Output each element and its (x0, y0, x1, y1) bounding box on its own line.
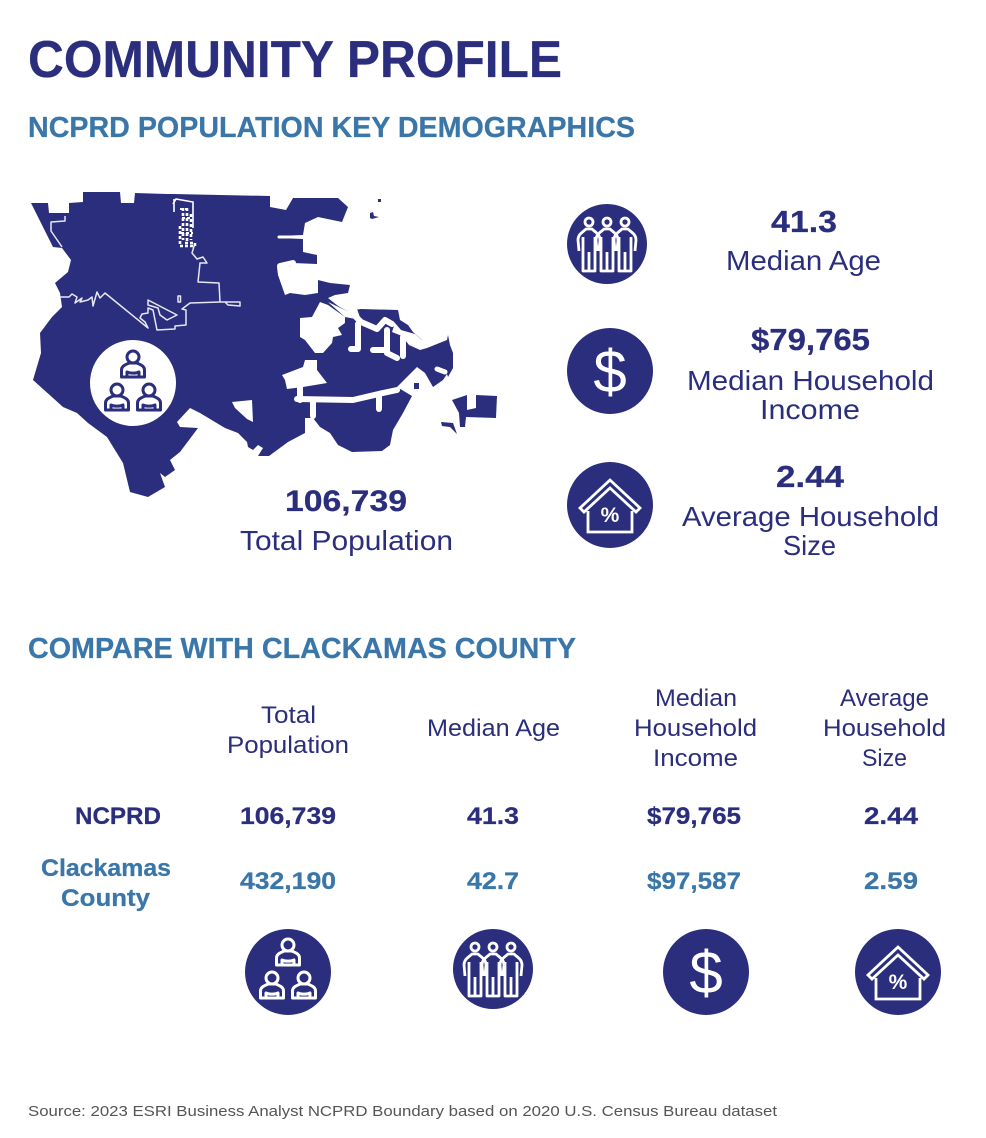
icon: income (567, 328, 653, 414)
stat: median household income: $79,765 (751, 322, 870, 357)
stat: average household size (682, 459, 939, 561)
icon: median age (567, 204, 647, 284)
stat: median household income (687, 322, 934, 425)
table row: Clackamas County: County (61, 885, 151, 912)
white corridors (279, 237, 445, 416)
heading: compare: COMPARE WITH CLACKAMAS COUNTY (28, 633, 576, 665)
stat: median age: 41.3 (771, 204, 837, 239)
table header: median age: Median Age (427, 715, 560, 742)
table header: average household size: Household (823, 715, 946, 742)
icon: household size (567, 462, 653, 548)
table row: NCPRD: 41.3 (467, 803, 519, 830)
heading: key demographics: NCPRD POPULATION KEY DEMOGRAPHICS (28, 112, 635, 144)
table header: average household size: Average (840, 685, 929, 712)
stat: median household income: Median Household (687, 365, 934, 396)
table row: NCPRD: $79,765 (647, 803, 741, 830)
title: COMMUNITY PROFILE (28, 31, 562, 89)
table row: Clackamas County: 432,190 (240, 868, 336, 895)
stat: average household size: 2.44 (776, 459, 845, 494)
table header: median household income (634, 685, 757, 772)
stat: total population (240, 485, 453, 556)
icon: age (453, 929, 533, 1009)
inner boundary lines (51, 216, 240, 330)
stat: median age: Median Age (726, 245, 881, 276)
table header: average household size: Size (862, 745, 907, 772)
east islands (452, 395, 497, 427)
source note: Source: 2023 ESRI Business Analyst NCPRD Boundary based on 2020 U.S. Census Bureau dataset (28, 1103, 778, 1120)
table header: average household size (823, 685, 946, 772)
map: NCPRD boundary (31, 192, 497, 497)
table row: Clackamas County: $97,587 (647, 868, 741, 895)
table header: total population: Population (227, 732, 349, 759)
speckled boundary (173, 199, 195, 246)
stat: average household size: Average Household (682, 501, 939, 532)
table header: median household income: Income (653, 745, 738, 772)
stat: average household size: Size (783, 530, 836, 561)
icon: population circle (90, 340, 176, 426)
table row: Clackamas County: 42.7 (467, 868, 519, 895)
table row: Clackamas County: 2.59 (864, 868, 918, 895)
table header: median household income: Median (655, 685, 737, 712)
table header: median household income: Household (634, 715, 757, 742)
table row: NCPRD: 2.44 (864, 803, 919, 830)
table header: total population (227, 702, 349, 759)
stat: total population: 106,739 (285, 485, 407, 518)
table row: NCPRD: NCPRD (75, 803, 161, 830)
table row: Clackamas County: Clackamas (41, 855, 171, 882)
table header: total population: Total (261, 702, 316, 729)
table row: Clackamas County (41, 855, 918, 912)
icon: house (855, 929, 941, 1015)
white holes in map (232, 302, 424, 422)
stat: median age (726, 204, 881, 276)
icon: income: $ (593, 338, 627, 405)
table row: NCPRD (75, 803, 919, 830)
stat: median household income: Income (760, 394, 860, 425)
icon: population (245, 929, 331, 1015)
icon: dollar (663, 929, 749, 1015)
icon: house: % (889, 971, 908, 994)
icon: household size: % (601, 504, 620, 527)
table row: NCPRD: 106,739 (240, 803, 336, 830)
stat: total population: Total Population (240, 525, 453, 556)
icon: dollar: $ (689, 939, 723, 1006)
